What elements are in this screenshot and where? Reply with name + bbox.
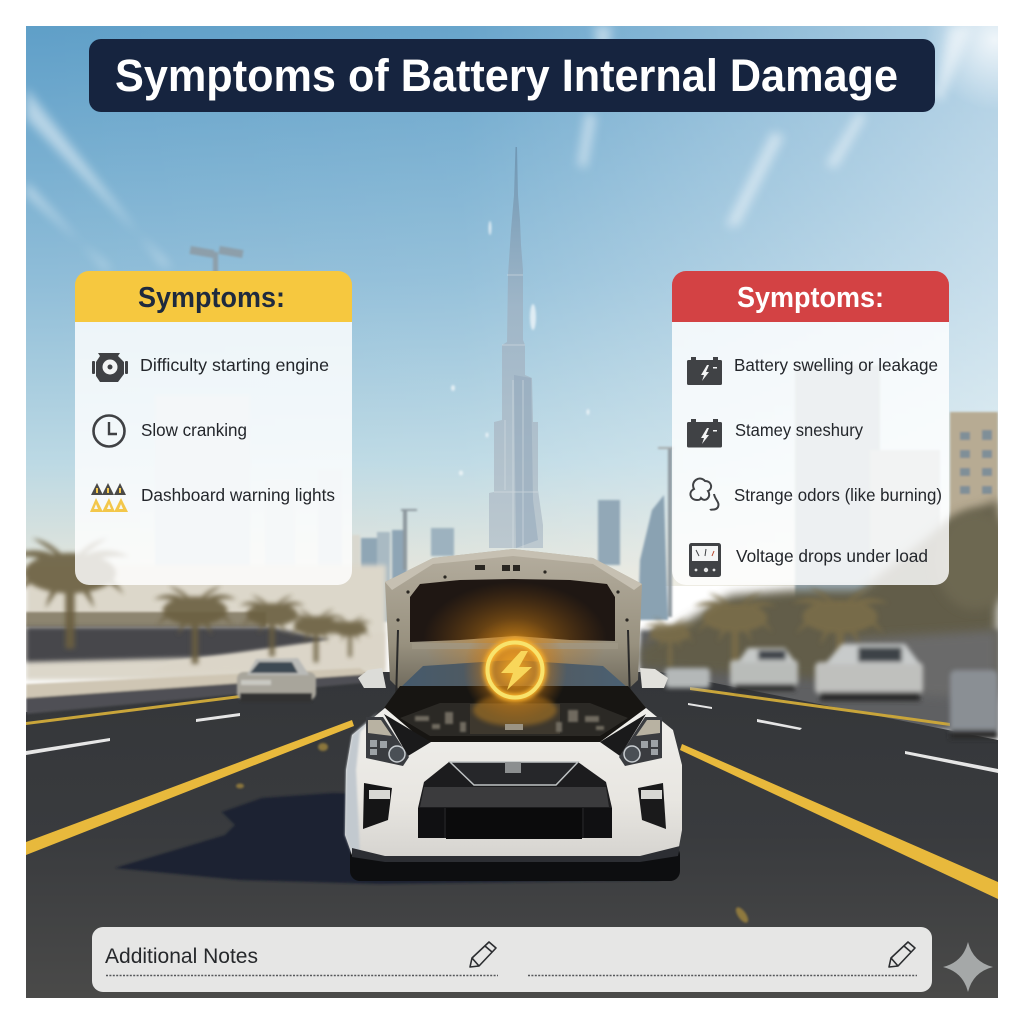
- sky: [26, 0, 1024, 586]
- open hood: [385, 549, 642, 702]
- tyres and underbody shadow: [350, 845, 680, 881]
- side mirrors: [358, 668, 668, 688]
- symptom text: Battery swelling or leakage: [734, 355, 938, 375]
- panel: additional notes: [92, 927, 932, 992]
- fog lights: [363, 783, 666, 829]
- road surface: [26, 672, 998, 998]
- right panel heading: Symptoms:: [737, 282, 884, 314]
- symptom text: Dashboard warning lights: [141, 485, 335, 505]
- left body reflection: [345, 712, 378, 853]
- icon: glowing lightning bolt warning: [463, 618, 567, 722]
- left roadside: flyover and palms: [11, 538, 386, 680]
- icon: warning triangles: [90, 483, 128, 512]
- background cars: [237, 644, 998, 739]
- title banner: [89, 39, 935, 112]
- icon: engine: [92, 353, 128, 382]
- icon: clock: [94, 416, 124, 446]
- dark wedges beside the hood line: [384, 714, 646, 756]
- engine bay: [384, 686, 646, 742]
- right panel body: [672, 322, 949, 585]
- windshield: [400, 660, 628, 688]
- icon: voltmeter: [689, 543, 721, 577]
- panel: right symptoms: [672, 271, 949, 585]
- left panel header: [75, 271, 352, 322]
- symptom text: Voltage drops under load: [736, 546, 928, 566]
- left panel body: [75, 322, 352, 585]
- symptom text: Slow cranking: [141, 420, 247, 440]
- symptom text: Stamey sneshury: [735, 420, 863, 440]
- car body: [345, 708, 682, 860]
- road markings: [26, 687, 998, 925]
- skyline buildings: [352, 366, 998, 623]
- left panel heading: Symptoms:: [138, 282, 285, 314]
- icon: battery: [687, 419, 722, 448]
- symptom text: Difficulty starting engine: [140, 355, 329, 375]
- front splitter: [352, 846, 680, 862]
- icon: pencil: [470, 942, 496, 967]
- title: Symptoms of Battery Internal Damage: [115, 50, 898, 101]
- distant lamp post: [189, 246, 244, 274]
- Burj tower: [489, 147, 543, 548]
- panel: left symptoms: [75, 271, 352, 585]
- right panel header: [672, 271, 949, 322]
- icon: four-point sparkle: [943, 942, 993, 992]
- symptom text: Strange odors (like burning): [734, 485, 942, 505]
- icon: pencil: [889, 942, 915, 967]
- right roadside: trees: [640, 500, 1015, 730]
- headlights: [366, 717, 662, 766]
- car shadow: [115, 793, 660, 884]
- car: white sports car with open hood: [345, 549, 682, 881]
- notes label: Additional Notes: [105, 945, 258, 968]
- icon: battery: [687, 357, 722, 385]
- guard rail: [26, 668, 372, 714]
- icon: smoke cloud: [690, 479, 718, 510]
- front grille: [418, 762, 612, 839]
